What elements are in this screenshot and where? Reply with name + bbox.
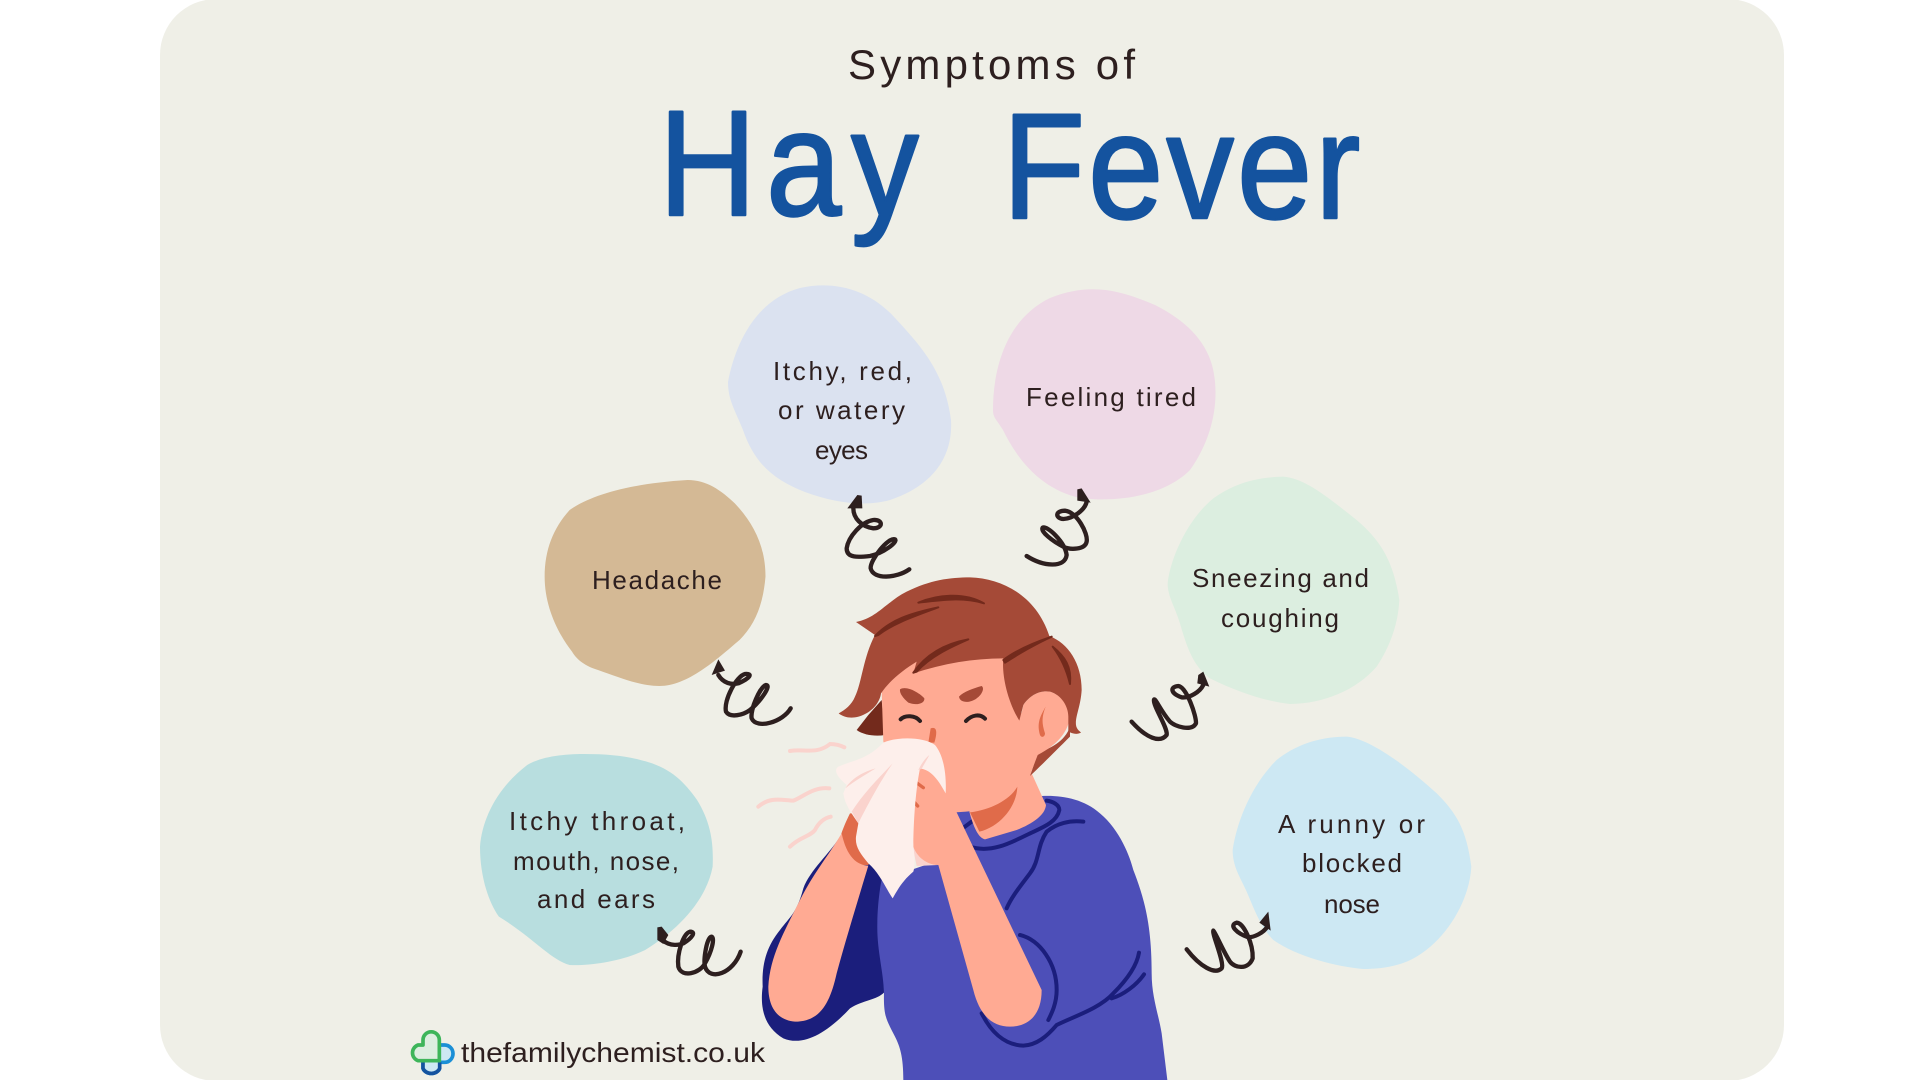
neck shadow	[970, 787, 1017, 832]
inner ear	[1039, 707, 1046, 737]
label: A runny or	[1278, 809, 1425, 839]
title line: Hay Fever: Fever	[1003, 83, 1363, 251]
symptom: itchy throat	[480, 754, 741, 974]
blob	[1233, 737, 1471, 969]
label	[509, 806, 685, 914]
nose	[928, 728, 936, 743]
eyebrows	[900, 686, 983, 704]
blob	[993, 289, 1216, 499]
back neck hair	[1030, 727, 1070, 776]
palm shadow	[912, 842, 938, 866]
title	[659, 41, 1363, 251]
face	[881, 650, 1038, 812]
left hand shadow	[839, 813, 880, 865]
label: Itchy, red,	[773, 356, 912, 386]
label: mouth, nose,	[513, 846, 679, 876]
arrow	[1027, 488, 1091, 564]
symptom: itchy eyes	[728, 285, 951, 577]
symptom: feeling tired	[993, 289, 1216, 564]
logo	[413, 1032, 766, 1073]
label: nose	[1324, 889, 1380, 919]
website address: thefamilychemist.co.uk	[461, 1037, 766, 1068]
blob	[728, 285, 951, 503]
hair strands	[875, 596, 1070, 684]
symptom: headache	[545, 480, 791, 724]
right arm and hand	[913, 768, 1042, 1027]
icon: green and blue cross	[413, 1032, 453, 1073]
arrow	[657, 927, 741, 974]
title line: Hay Fever: Hay	[659, 80, 929, 248]
title line: Symptoms of: Symptoms of	[848, 41, 1135, 88]
label	[1278, 809, 1425, 919]
blob	[545, 480, 765, 686]
back sleeve	[762, 837, 884, 1041]
neck	[969, 760, 1046, 839]
closed eyes	[901, 715, 985, 721]
label	[773, 356, 912, 465]
illustration: person sneezing into a tissue	[758, 577, 1167, 1080]
finger lines	[915, 782, 923, 806]
tissue folds	[845, 755, 929, 823]
symptom: sneezing and coughing	[1132, 477, 1399, 739]
front hair	[839, 577, 1082, 734]
back hair	[857, 700, 885, 736]
blob	[1168, 477, 1399, 704]
arrow	[1187, 912, 1271, 971]
label: Headache	[592, 565, 722, 595]
left arm	[768, 833, 868, 1022]
label: Itchy throat,	[509, 806, 685, 836]
shirt	[877, 796, 1167, 1080]
label: Feeling tired	[1026, 382, 1196, 412]
tissue	[836, 738, 946, 898]
shirt creases	[963, 801, 1144, 1046]
label: blocked	[1302, 848, 1402, 878]
arrow	[847, 495, 909, 577]
label: Sneezing and	[1192, 563, 1369, 593]
label	[1192, 563, 1369, 633]
label: and ears	[537, 884, 655, 914]
label: or watery	[778, 395, 905, 425]
sneeze lines	[758, 744, 844, 847]
arrow	[1132, 672, 1209, 739]
blob	[480, 754, 713, 965]
label: coughing	[1221, 603, 1339, 633]
label: eyes	[815, 435, 868, 465]
arrow	[712, 659, 791, 724]
symptom: runny or blocked nose	[1187, 737, 1471, 971]
ear	[1020, 691, 1070, 755]
